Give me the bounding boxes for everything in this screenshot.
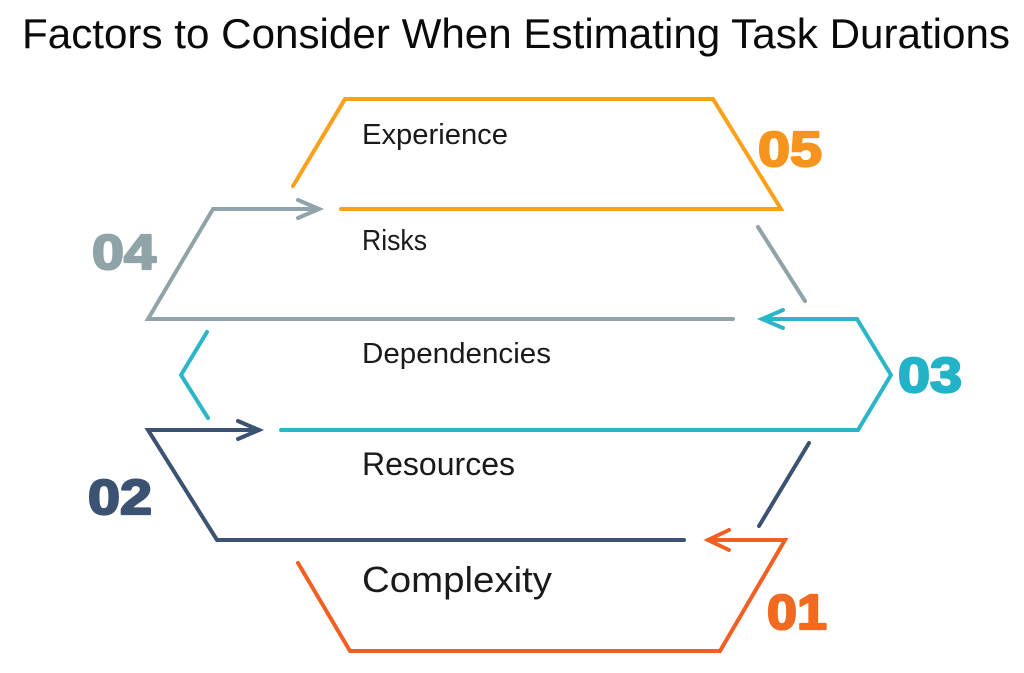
arrow head 04 — [298, 200, 319, 218]
arrow head 01 — [708, 530, 729, 550]
arrow head 03 — [762, 310, 783, 328]
label: Resources: Resources — [362, 446, 515, 482]
label: Dependencies: Dependencies — [362, 338, 551, 370]
number 03: 03 — [898, 349, 962, 403]
teal outline 03 — [281, 319, 891, 430]
segment 02: Resources — [88, 421, 809, 540]
orange-red outline 01 — [298, 540, 785, 651]
navy short stroke — [759, 443, 809, 526]
number 05: 05 — [758, 123, 822, 177]
segment 05: Experience — [293, 99, 822, 209]
number 02: 02 — [88, 471, 152, 525]
number 04: 04 — [92, 226, 156, 280]
label: Risks: Risks — [362, 225, 427, 257]
navy outline 02 — [148, 430, 684, 540]
label: Complexity: Complexity — [362, 559, 552, 600]
label: Experience: Experience — [362, 119, 508, 151]
segment 03: Dependencies — [181, 310, 962, 430]
title: Factors to Consider When Estimating Task Durations — [22, 10, 1010, 57]
grey outline 04 — [148, 209, 733, 319]
grey short stroke 04 — [758, 227, 805, 301]
orange outline 05 — [293, 99, 781, 209]
teal small bracket — [181, 332, 208, 418]
number 01: 01 — [767, 586, 827, 640]
arrow head 02 — [238, 421, 259, 439]
segment 04: Risks — [92, 200, 805, 319]
segment 01: Complexity — [298, 530, 827, 651]
